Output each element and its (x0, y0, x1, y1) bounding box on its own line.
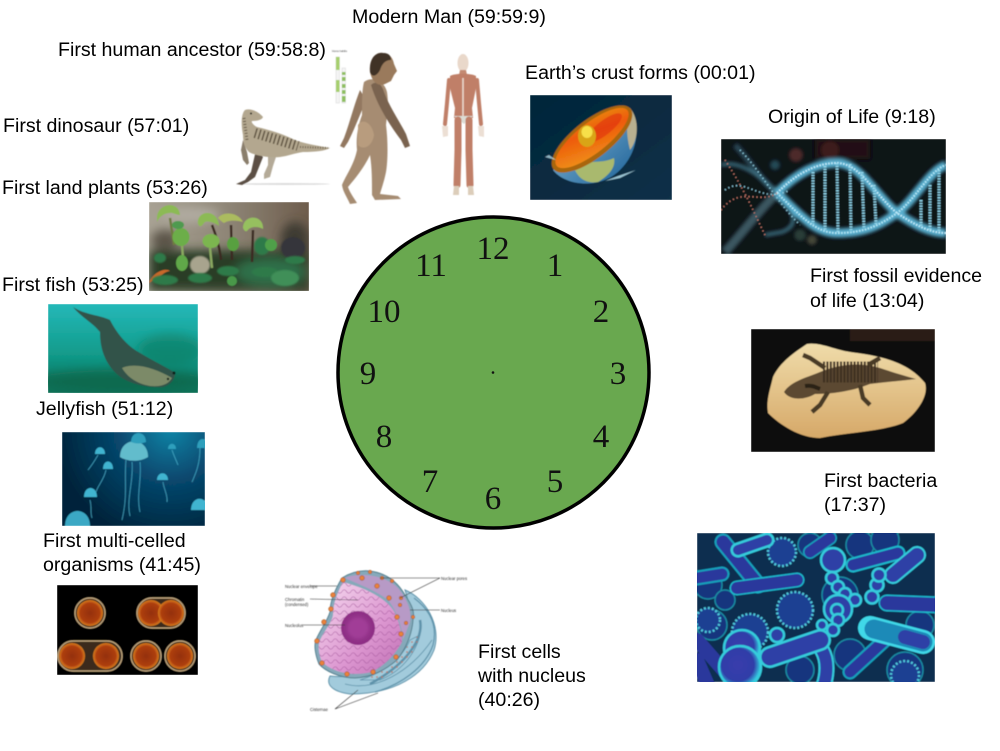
height chart: Homo habilis (332, 49, 348, 53)
clock numerals: 6 (485, 481, 501, 517)
spiked spheres (696, 538, 919, 689)
label: first cells with nucleus: First cells (478, 641, 561, 663)
label: first fish: First fish (53:25) (2, 274, 144, 296)
image: cell nucleus diagram (285, 570, 467, 712)
image: fossil (751, 329, 935, 452)
label: first multi-celled organisms: First multi-celled (43, 530, 186, 552)
image: first fish (48, 304, 198, 393)
beads and spheres (719, 548, 886, 688)
rods (697, 538, 940, 690)
buttock shading (358, 122, 374, 148)
image: earth cross-section (530, 94, 672, 200)
rear arm (340, 90, 366, 148)
clock numerals: 3 (610, 356, 626, 392)
label: origin of life: Origin of Life (9:18) (768, 106, 936, 128)
clock numerals (360, 231, 626, 517)
clock numerals: 2 (593, 294, 609, 330)
label: first fossil evidence: First fossil evidence (810, 265, 982, 287)
clock numerals: 4 (593, 419, 609, 455)
clock numerals: 7 (422, 464, 438, 500)
nuclear pores (315, 570, 415, 676)
nucleus back wall (345, 575, 410, 640)
diagram labels: Nucleus (441, 608, 456, 613)
head (370, 53, 397, 85)
endoplasmic reticulum (329, 590, 436, 694)
label: jellyfish: Jellyfish (51:12) (36, 398, 173, 420)
label: modern man: Modern Man (59:59:9) (352, 6, 546, 28)
diagram labels: Cisternae (310, 707, 329, 712)
fish body (73, 307, 175, 387)
label: first human ancestor: First human ancestor (59:58:8) (58, 39, 326, 61)
label: first dinosaur: First dinosaur (57:01) (3, 115, 189, 137)
diagram labels: Nuclear pores (441, 576, 467, 581)
label: first cells with nucleus: with nucleus (477, 665, 586, 687)
clock numerals: 5 (547, 464, 563, 500)
stems (170, 218, 253, 268)
image: jellyfish (62, 432, 208, 526)
height chart (332, 49, 348, 103)
diagram labels: (condensed) (285, 602, 309, 607)
label: earth's crust forms: Earth’s crust forms (00:01) (525, 62, 756, 84)
image: DNA helix (721, 139, 946, 254)
clock center dot (492, 371, 494, 374)
nucleus interior (319, 582, 402, 674)
clock numerals: 10 (368, 294, 400, 330)
clock numerals: 11 (415, 248, 447, 284)
image: human ancestor (340, 53, 410, 204)
fossil creature (784, 355, 916, 412)
nucleolus (341, 611, 375, 645)
clock numerals: 9 (360, 356, 376, 392)
rock and leaves (190, 256, 210, 274)
clock dial (338, 217, 649, 528)
diagram labels: Nucleolus (285, 623, 303, 628)
image: modern man muscle figure (442, 54, 484, 195)
diagram labels: Nuclear envelope (285, 584, 318, 589)
clock numerals: 1 (547, 248, 563, 284)
clock numerals: 12 (476, 231, 510, 267)
label: first multi-celled organisms: organisms (41:45) (43, 554, 201, 576)
tentacles (88, 448, 200, 520)
label: first land plants: First land plants (53:26) (2, 177, 208, 199)
diagram labels: Chromatin (285, 597, 305, 602)
clock numerals: 8 (376, 419, 392, 455)
nucleus shell (315, 571, 414, 678)
label: first fossil evidence: of life (13:04) (810, 290, 924, 312)
image: first dinosaur (236, 109, 330, 185)
leader lines (303, 578, 440, 709)
torso and legs (342, 79, 401, 204)
caps (157, 205, 277, 286)
jelly bells (65, 433, 208, 526)
label: first bacteria: First bacteria (824, 470, 937, 492)
clock face (338, 217, 649, 528)
image: bacteria (697, 533, 935, 682)
diagram labels (285, 576, 467, 712)
image: land plants (149, 202, 309, 291)
front arm (371, 83, 410, 148)
label: first cells with nucleus: (40:26) (478, 689, 540, 711)
image: dividing cells (57, 585, 198, 675)
label: first bacteria: (17:37) (824, 494, 886, 516)
